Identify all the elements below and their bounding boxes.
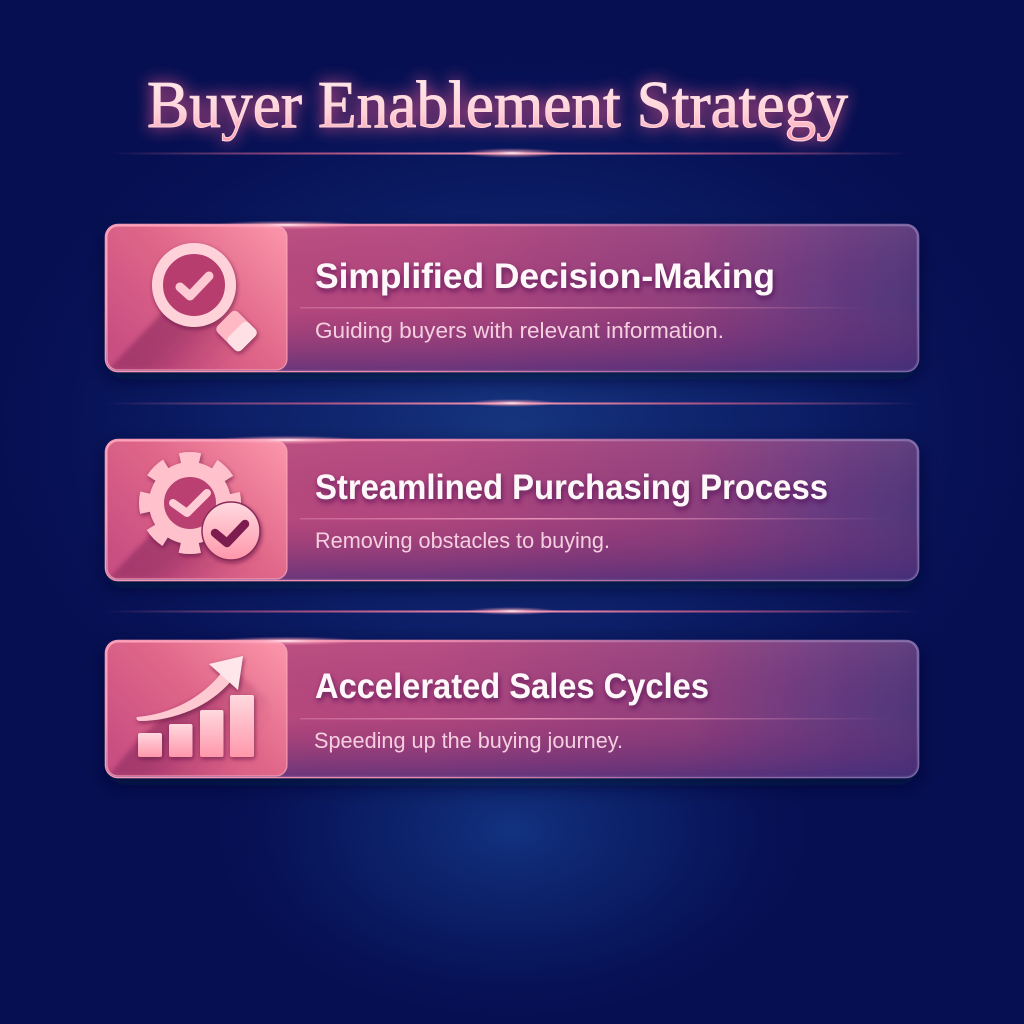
- panel: streamlined purchasing process: [106, 436, 918, 581]
- heading rule: [300, 307, 870, 308]
- icon: gear with checks: [136, 449, 260, 560]
- card body: [106, 440, 918, 580]
- card body: [106, 641, 918, 777]
- heading: Streamlined Purchasing Process: [315, 468, 828, 507]
- description: Guiding buyers with relevant information.: [315, 318, 724, 343]
- description: Speeding up the buying journey.: [314, 728, 623, 753]
- title: Buyer Enablement Strategy: [147, 68, 848, 142]
- heading rule: [300, 518, 890, 520]
- icon tile: [107, 642, 287, 778]
- panel: accelerated sales cycles: [106, 636, 918, 778]
- heading: Accelerated Sales Cycles: [315, 667, 709, 706]
- section divider: [105, 399, 920, 407]
- icon: rising bars and arrow: [136, 656, 254, 757]
- description: Removing obstacles to buying.: [315, 528, 610, 553]
- title: Buyer Enablement Strategy: [147, 68, 848, 142]
- top edge glare: [212, 636, 362, 646]
- heading rule: [300, 718, 890, 720]
- title divider: [110, 148, 910, 158]
- icon: magnifier with check: [158, 248, 259, 353]
- card body: [106, 225, 918, 371]
- icon tile: [107, 226, 287, 372]
- top edge glare: [212, 220, 362, 230]
- panel: simplified decision-making: [106, 220, 918, 372]
- icon tile: [107, 441, 287, 581]
- top edge glare: [212, 436, 362, 444]
- heading: Simplified Decision-Making: [315, 257, 775, 296]
- section divider: [105, 607, 920, 615]
